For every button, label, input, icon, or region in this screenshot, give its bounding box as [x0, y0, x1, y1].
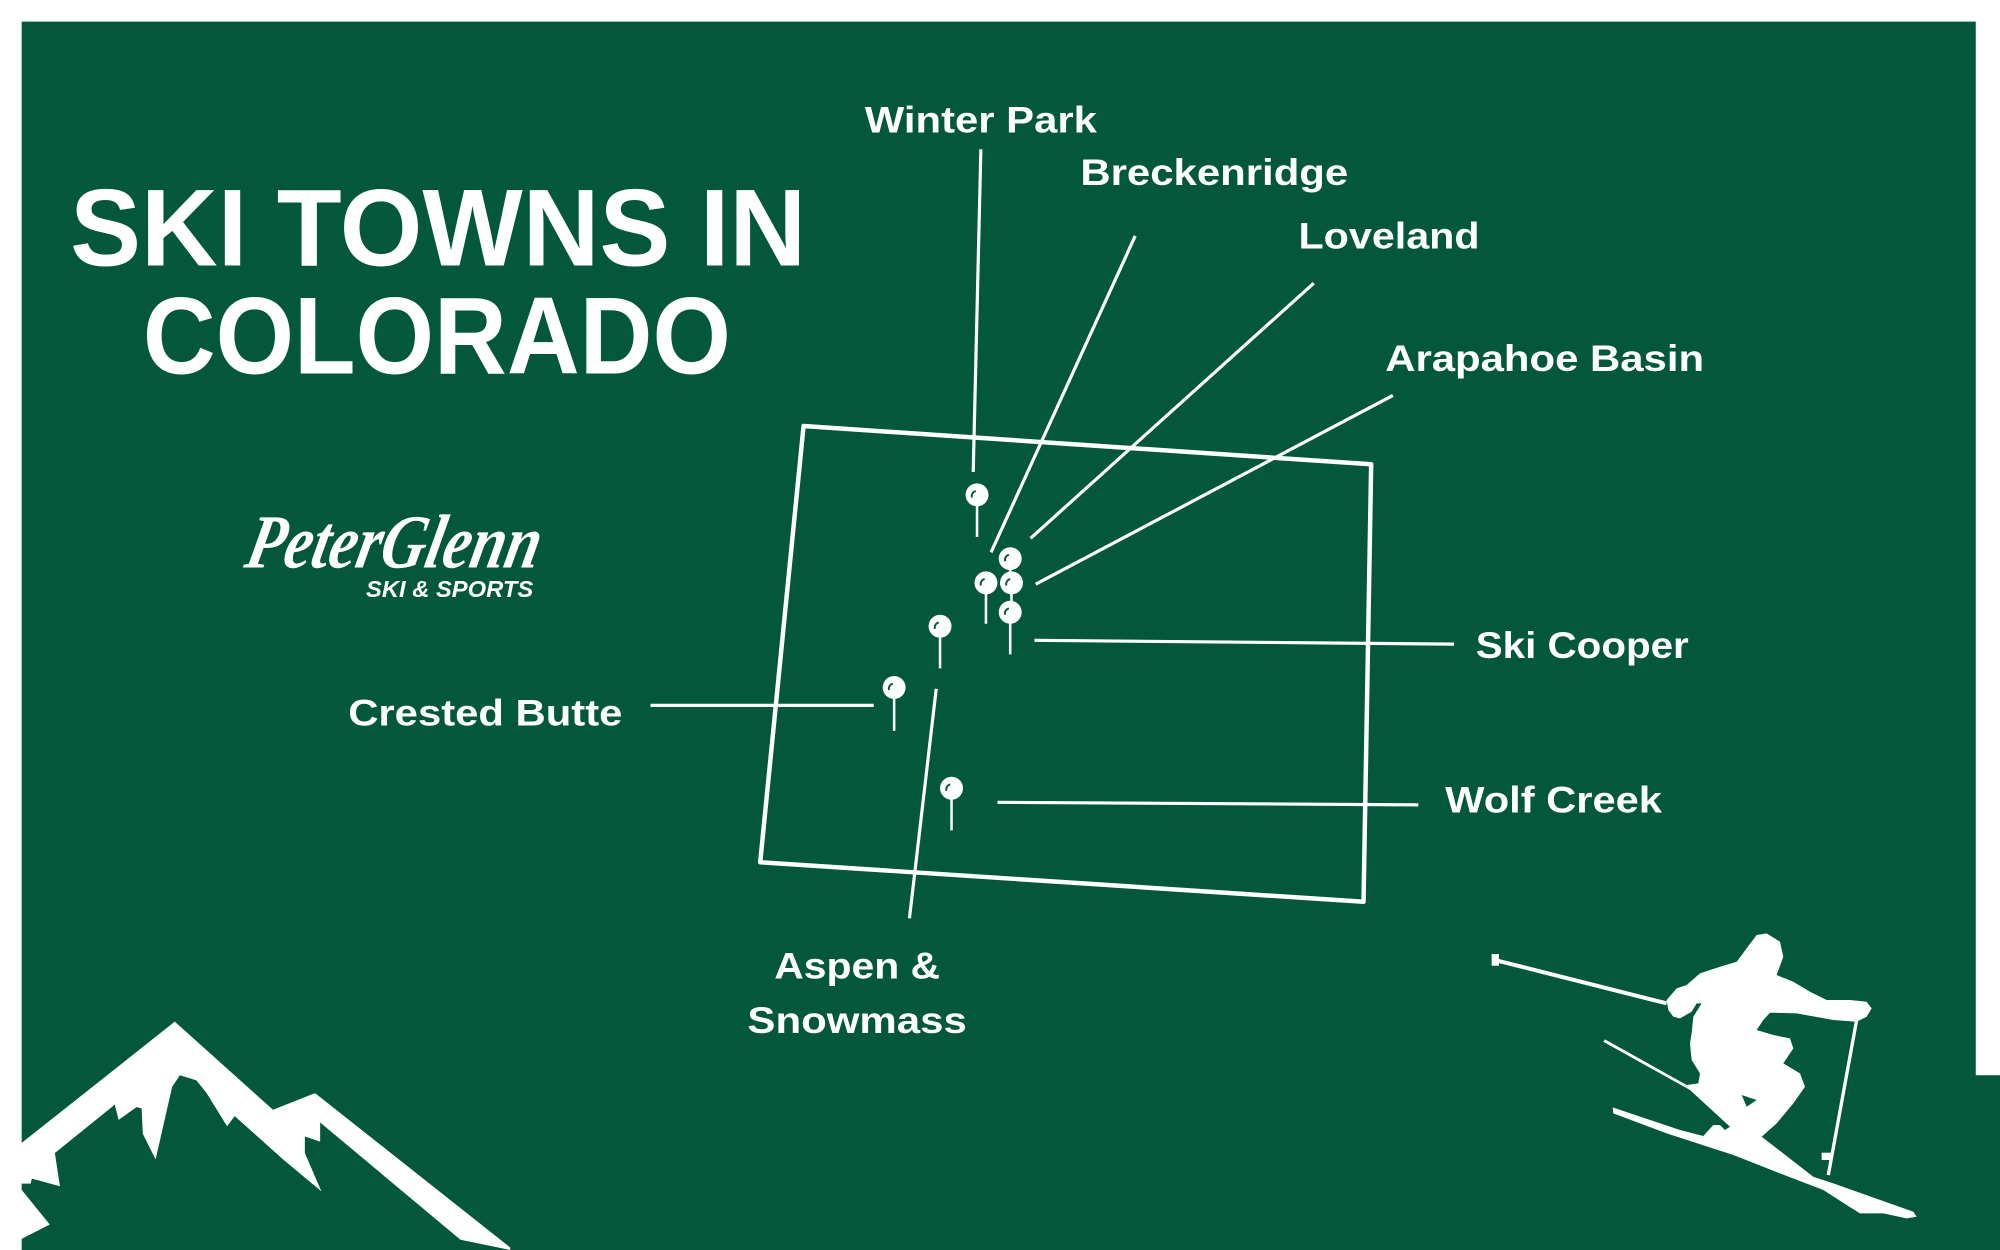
leader lines	[651, 149, 1454, 918]
title: SKI TOWNS IN	[70, 167, 806, 289]
labels: Snowmass	[747, 1000, 967, 1041]
title: COLORADO	[143, 276, 731, 398]
labels: Arapahoe Basin	[1385, 338, 1704, 379]
labels: Winter Park	[865, 100, 1097, 141]
skier silhouette	[1492, 933, 1917, 1218]
labels	[348, 100, 1704, 1041]
logo: Peter Glenn: PeterGlenn	[238, 499, 551, 584]
labels: Breckenridge	[1080, 152, 1348, 193]
map pins	[883, 483, 1023, 830]
mountain illustration	[0, 1022, 510, 1250]
labels: Crested Butte	[348, 693, 622, 734]
title	[70, 167, 806, 398]
labels: Aspen &	[774, 945, 940, 986]
labels: Wolf Creek	[1445, 779, 1662, 820]
labels: Ski Cooper	[1476, 625, 1689, 666]
labels: Loveland	[1298, 216, 1480, 257]
logo: Peter Glenn: SKI & SPORTS	[366, 576, 534, 602]
map: Colorado outline	[760, 426, 1371, 902]
